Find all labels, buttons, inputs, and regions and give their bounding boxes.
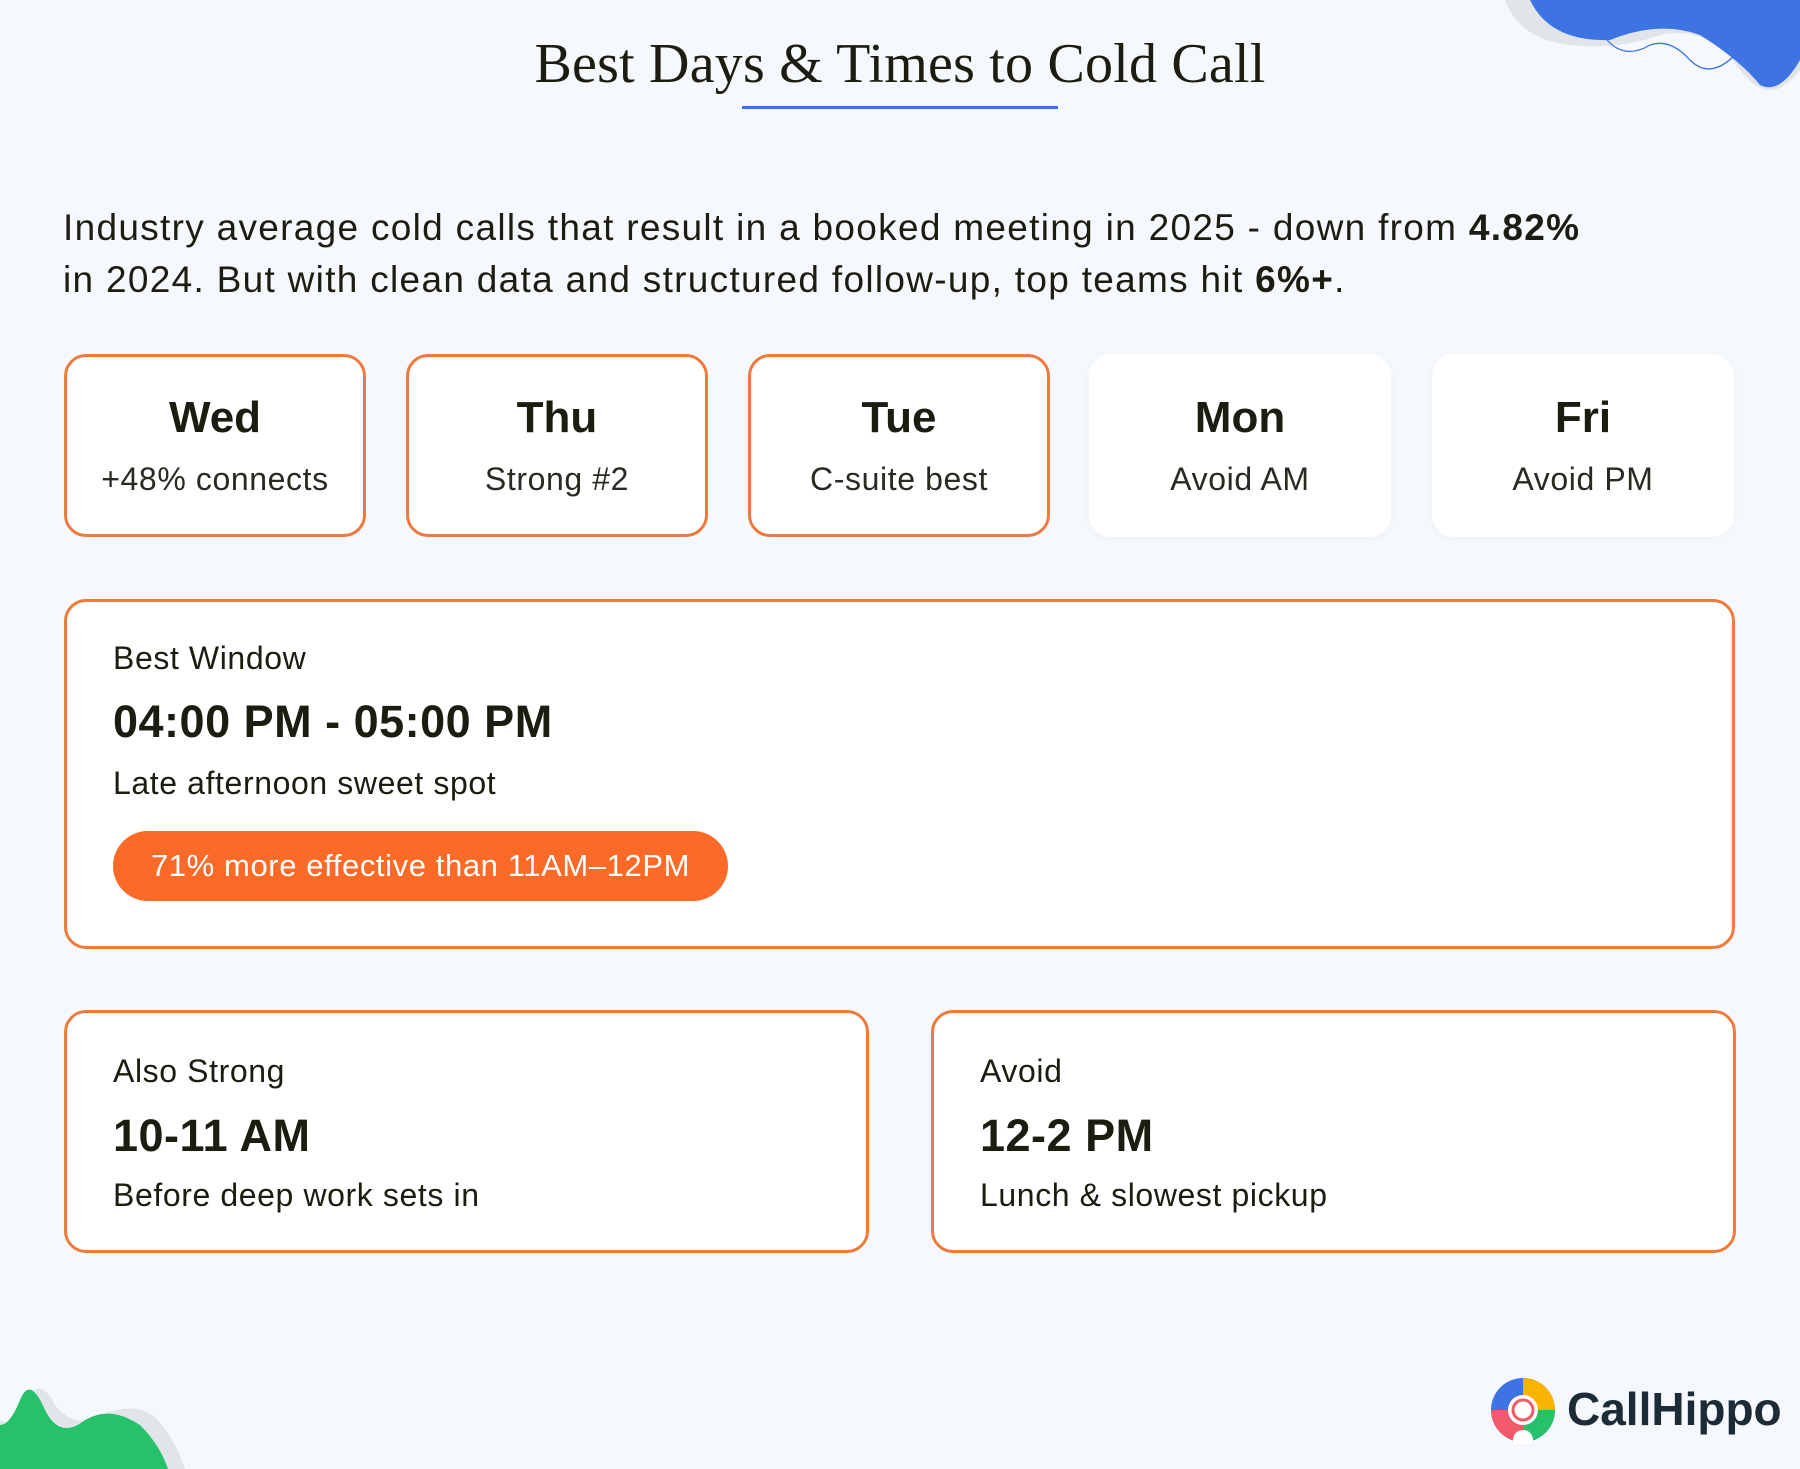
day card: Mon <box>1089 354 1391 537</box>
intro paragraph: Industry average cold calls that result in a booked meeting in 2025 - down from 4.82% <box>63 207 1580 248</box>
intro paragraph <box>63 207 1580 300</box>
day card: Wed: Wed <box>169 393 261 442</box>
day card: Thu: Thu <box>517 393 597 442</box>
day card: Thu <box>406 354 708 537</box>
panel: also strong <box>64 1010 869 1253</box>
icon: logo mark <box>1491 1378 1555 1444</box>
description: Late afternoon sweet spot <box>113 765 496 801</box>
time: 12-2 PM <box>980 1110 1154 1161</box>
day card: Fri: Avoid PM <box>1512 461 1654 497</box>
day card: Fri <box>1432 354 1734 537</box>
day card: Fri: Fri <box>1555 393 1611 442</box>
day card: Wed: +48% connects <box>101 461 329 497</box>
day card: Mon: Avoid AM <box>1170 461 1310 497</box>
label: Best Window <box>113 640 306 676</box>
panel: avoid <box>931 1010 1736 1253</box>
decoration: top right blob <box>1505 0 1800 90</box>
title underline <box>742 106 1058 109</box>
decoration: bottom left blob <box>0 1388 185 1469</box>
day card: Tue: C-suite best <box>810 461 988 497</box>
title: Best Days & Times to Cold Call <box>534 33 1266 95</box>
label: Avoid <box>980 1053 1062 1089</box>
day card: Tue: Tue <box>862 393 936 442</box>
logo text: CallHippo <box>1567 1383 1782 1435</box>
description: Before deep work sets in <box>113 1177 480 1213</box>
day card: Tue <box>748 354 1050 537</box>
day card: Mon: Mon <box>1195 393 1285 442</box>
pill: 71% more effective than 11AM–12PM <box>151 848 690 883</box>
label: Also Strong <box>113 1053 285 1089</box>
logo <box>1491 1378 1782 1444</box>
time: 04:00 PM - 05:00 PM <box>113 696 553 747</box>
pill <box>113 831 728 901</box>
panel: best window <box>64 599 1735 949</box>
day card: Thu: Strong #2 <box>485 461 629 497</box>
day card: Wed <box>64 354 366 537</box>
description: Lunch & slowest pickup <box>980 1177 1328 1213</box>
intro paragraph: in 2024. But with clean data and structured follow-up, top teams hit 6%+. <box>63 259 1346 300</box>
time: 10-11 AM <box>113 1110 310 1161</box>
